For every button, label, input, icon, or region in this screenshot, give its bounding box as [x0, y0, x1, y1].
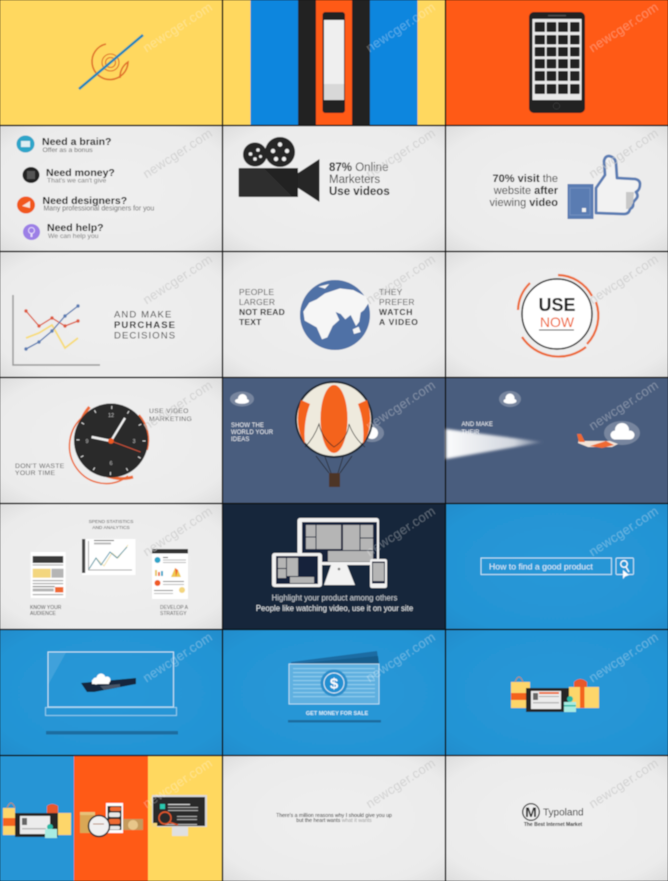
list item: need help: Need help?: [47, 222, 104, 234]
text: they prefer watch a video: A VIDEO: [379, 317, 419, 327]
icon group: monitor with magnifier: [152, 795, 207, 836]
icon: orange spiral: [92, 44, 128, 80]
watermarks: newcger.com: [140, 629, 215, 685]
list item: need designers: Many professional designers for you: [44, 206, 154, 212]
list item: need money: Need money?: [46, 167, 115, 179]
text: show the world your ideas: IDEAS: [231, 437, 250, 443]
underline bar: [288, 720, 381, 722]
text: and make their: THEIR: [462, 430, 480, 436]
text: 87% online marketers: [329, 162, 390, 198]
text: 87% online marketers: Marketers: [329, 174, 380, 186]
text: show the world your ideas: [231, 423, 274, 443]
text: highlight your product: [256, 594, 413, 613]
watermarks: newcger.com: [586, 629, 661, 685]
panel: quote: [223, 756, 445, 881]
icon: cloud small: [230, 392, 254, 406]
panel: colour stripes with phone: [223, 0, 445, 125]
text: they prefer watch a video: WATCH: [379, 307, 413, 317]
watermarks: newcger.com: [586, 0, 661, 55]
text: use video marketing: MARKETING: [149, 416, 192, 423]
icon: tablet: [526, 688, 569, 712]
icon: monitor: [298, 518, 379, 585]
list item: need a brain: [16, 136, 111, 154]
icon: smartphone with app grid: [529, 12, 585, 113]
icon: clock: 3: [132, 439, 136, 445]
search field: How to find a good product: [489, 562, 593, 572]
text: spend statistics and analytics: SPEND STATISTICS: [89, 519, 133, 525]
text: people larger not read text: LARGER: [239, 297, 275, 307]
text: develop a strategy: [160, 605, 189, 617]
icon: orange arcs: [518, 275, 598, 357]
panel: money: [223, 630, 445, 755]
text: million reasons quote: [276, 813, 392, 824]
text: 70% visit: [490, 173, 559, 209]
icon: phone: [322, 12, 345, 113]
panel: documents and strategy: [0, 504, 222, 629]
watermarks: newcger.com: [363, 125, 438, 181]
search field: [481, 558, 612, 574]
watermarks: newcger.com: [140, 755, 215, 811]
panel: film camera stat: [223, 126, 445, 251]
text: show the world your ideas: WORLD YOUR: [231, 430, 274, 436]
line chart: [13, 295, 100, 365]
text: use video marketing: [149, 408, 192, 423]
text: get money for sale: GET MONEY FOR SALE: [306, 711, 368, 717]
text: 70% visit: website after: [493, 185, 559, 197]
watermarks: newcger.com: [140, 251, 215, 307]
watermarks: newcger.com: [586, 251, 661, 307]
text: spend statistics and analytics: AND ANALYTICS: [92, 525, 130, 531]
panel: need list: [0, 126, 222, 251]
icon: thumbs up: [568, 156, 640, 219]
list item: need designers: Need designers?: [42, 195, 127, 207]
panel: laptop upload: [0, 630, 222, 755]
text: highlight your product: Highlight your product among others: [272, 594, 397, 602]
text: and make their: AND MAKE: [462, 422, 493, 428]
panel: thumbs up stat: [446, 126, 668, 251]
text: highlight your product: People like watching video, use it on your site: [256, 604, 413, 613]
watermarks: newcger.com: [586, 377, 661, 433]
text: develop a strategy: DEVELOP A: [160, 605, 189, 611]
list item: need help: [23, 222, 104, 240]
watermarks: newcger.com: [140, 377, 215, 433]
panel: three colour collage: [0, 756, 222, 881]
text: they prefer watch a video: PREFER: [379, 297, 415, 307]
text: people larger not read text: PEOPLE: [239, 287, 274, 297]
text: don't waste your time: [15, 463, 65, 477]
text: they prefer watch a video: THEY: [379, 287, 403, 297]
text: don't waste your time: DON'T WASTE: [15, 463, 65, 470]
panel: plane: [446, 378, 668, 503]
watermarks: newcger.com: [140, 503, 215, 559]
light beam: [446, 429, 543, 459]
text: know your audience: [30, 605, 62, 617]
watermarks: newcger.com: [363, 0, 438, 55]
panel: shopping items: [446, 630, 668, 755]
text: people larger not read text: TEXT: [239, 317, 262, 327]
icon: phone: [370, 559, 387, 588]
logo: Typoland: The Best Internet Market: [524, 822, 583, 828]
watermarks: newcger.com: [586, 125, 661, 181]
list item: need designers: [17, 195, 154, 214]
chart: statistics: [82, 539, 136, 575]
watermarks: newcger.com: [363, 503, 438, 559]
logo: Typoland: Typoland: [543, 808, 584, 818]
watermarks: newcger.com: [363, 755, 438, 811]
panel: use now: [446, 252, 668, 377]
panel: hot air balloon: [223, 378, 445, 503]
icon: orange arcs: [69, 407, 148, 484]
text: know your audience: AUDIENCE: [30, 611, 57, 617]
icon: globe: [300, 280, 370, 350]
text: and make purchase decisions: PURCHASE: [114, 320, 176, 331]
text: people larger not read text: [239, 287, 285, 327]
document: audience report: [31, 552, 66, 598]
logo: Typoland: M: [525, 804, 537, 820]
text: and make purchase decisions: DECISIONS: [114, 330, 176, 342]
icon: tablet: [272, 553, 322, 587]
watermarks: newcger.com: [363, 377, 438, 433]
text: 87% online marketers: 87% Online: [329, 162, 388, 174]
text: spend statistics and analytics: [89, 519, 133, 531]
panel: yellow coin with line: [0, 0, 222, 125]
text: and make their: [462, 422, 493, 436]
icon: film camera: [239, 137, 320, 202]
text: 70% visit: 70% visit the: [493, 173, 558, 185]
list item: need money: [22, 167, 115, 184]
icon: blue diagonal line: [79, 35, 143, 89]
text: 70% visit: viewing video: [490, 197, 558, 209]
watermarks: newcger.com: [586, 503, 661, 559]
badge: use now: NOW: [540, 314, 575, 330]
text: and make purchase decisions: AND MAKE: [114, 310, 172, 320]
text: use video marketing: USE VIDEO: [149, 408, 189, 415]
icon: gift box: [569, 679, 599, 708]
text: and make purchase decisions: [114, 310, 176, 342]
icon: dark bar with cloud: [81, 674, 136, 692]
text: people larger not read text: NOT READ: [239, 307, 285, 317]
list item: need a brain: Offer as a bonus: [42, 147, 93, 154]
icon: banknote stack: [289, 651, 379, 704]
icon: clock: 12: [108, 413, 114, 419]
icon: clock: 9: [85, 439, 89, 445]
watermarks: [140, 0, 661, 811]
list item: need help: We can help you: [48, 233, 99, 240]
icon: plane: [577, 434, 618, 448]
panel: globe: [223, 252, 445, 377]
watermarks: newcger.com: [363, 251, 438, 307]
list item: need a brain: Need a brain?: [42, 136, 111, 148]
list item: need money: That's we can't give: [47, 178, 106, 184]
text: know your audience: KNOW YOUR: [30, 605, 62, 611]
document: strategy notepad: [152, 549, 188, 599]
watermarks: newcger.com: [140, 0, 215, 55]
icon: cloud small: [499, 391, 521, 407]
watermarks: newcger.com: [363, 629, 438, 685]
icon: cloud behind balloon: [360, 424, 384, 442]
icon: search button and cursor: [616, 558, 634, 579]
icon: clock: [74, 404, 148, 478]
panel: responsive devices: [223, 504, 445, 629]
text: 87% online marketers: Use videos: [329, 186, 390, 198]
text: don't waste your time: YOUR TIME: [15, 470, 56, 477]
icon: teal stack: [564, 696, 576, 712]
icon: shopping bag: [511, 677, 530, 708]
badge: use now: [522, 279, 592, 349]
text: show the world your ideas: SHOW THE: [231, 423, 264, 429]
panel: orange phone: [446, 0, 668, 125]
icon: clock: 6: [109, 461, 113, 467]
watermarks: newcger.com: [586, 755, 661, 811]
icon group: cup, clock, phone, watch: [80, 803, 143, 836]
icon: laptop outline: [46, 652, 176, 716]
text: million reasons quote: There's a million reasons why I should give you up: [276, 813, 392, 819]
panel: search box: [446, 504, 668, 629]
panel: typoland logo: [446, 756, 668, 881]
watermarks: newcger.com: [140, 125, 215, 181]
text: million reasons quote: but the heart wants what it wants: [296, 818, 372, 824]
text: they prefer watch a video: [379, 287, 419, 327]
shadow bar: [46, 731, 178, 734]
icon: banknote stack: $: [330, 676, 339, 692]
icon group: bag, gift, tablet: [3, 803, 71, 838]
text: develop a strategy: STRATEGY: [160, 611, 187, 617]
icon: balloon: [296, 382, 372, 487]
badge: use now: USE: [538, 295, 576, 315]
panel: clock: [0, 378, 222, 503]
logo: Typoland: [523, 804, 584, 828]
icon: cloud large: [604, 421, 640, 445]
panel: line chart purchase decisions: [0, 252, 222, 377]
